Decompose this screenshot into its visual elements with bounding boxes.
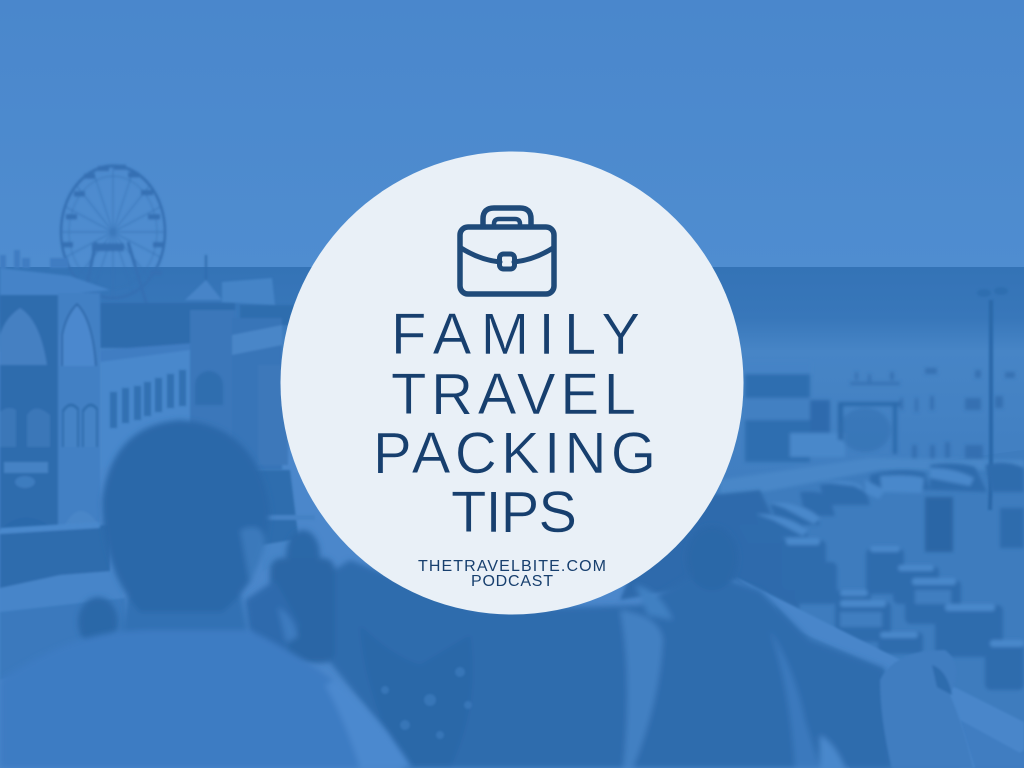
crowd xyxy=(78,526,892,768)
parked cars xyxy=(620,463,1024,690)
title line 3: PACKING xyxy=(373,421,656,486)
light pole xyxy=(977,287,1008,510)
site name: THETRAVELBITE.COM xyxy=(418,558,606,575)
head xyxy=(102,420,270,612)
floral dress pattern xyxy=(381,667,472,739)
title xyxy=(373,302,656,545)
ear xyxy=(240,527,265,585)
circle xyxy=(280,152,744,614)
car rows lower xyxy=(782,540,1024,690)
shirt highlight xyxy=(325,680,412,768)
dark signs behind crowd xyxy=(620,490,800,610)
shoulder lit xyxy=(620,610,663,768)
car rows upper xyxy=(738,463,1024,543)
left wall xyxy=(0,470,315,680)
left building xyxy=(0,268,110,530)
foreground man xyxy=(0,420,412,768)
raised hand at right xyxy=(880,650,973,768)
icon: briefcase xyxy=(460,208,554,294)
sky xyxy=(0,0,1024,270)
sea xyxy=(0,267,1024,352)
title line 1: FAMILY xyxy=(391,302,640,367)
right wall xyxy=(735,577,1024,768)
ferris wheel xyxy=(61,165,165,316)
central circle panel xyxy=(280,152,744,614)
person: rear-centre heads xyxy=(686,526,738,590)
subtitle xyxy=(418,558,606,590)
boardwalk arcade windows xyxy=(110,370,223,428)
beach xyxy=(700,350,1024,500)
crowd mass xyxy=(255,560,892,768)
distant pier xyxy=(0,250,300,470)
title line 4: TIPS xyxy=(451,480,577,545)
shirt xyxy=(0,630,412,768)
road xyxy=(720,450,1024,768)
podcast label: PODCAST xyxy=(471,573,553,590)
right pavilion and beach scene xyxy=(720,362,1024,500)
title line 2: TRAVEL xyxy=(391,362,636,427)
neck xyxy=(120,565,250,640)
